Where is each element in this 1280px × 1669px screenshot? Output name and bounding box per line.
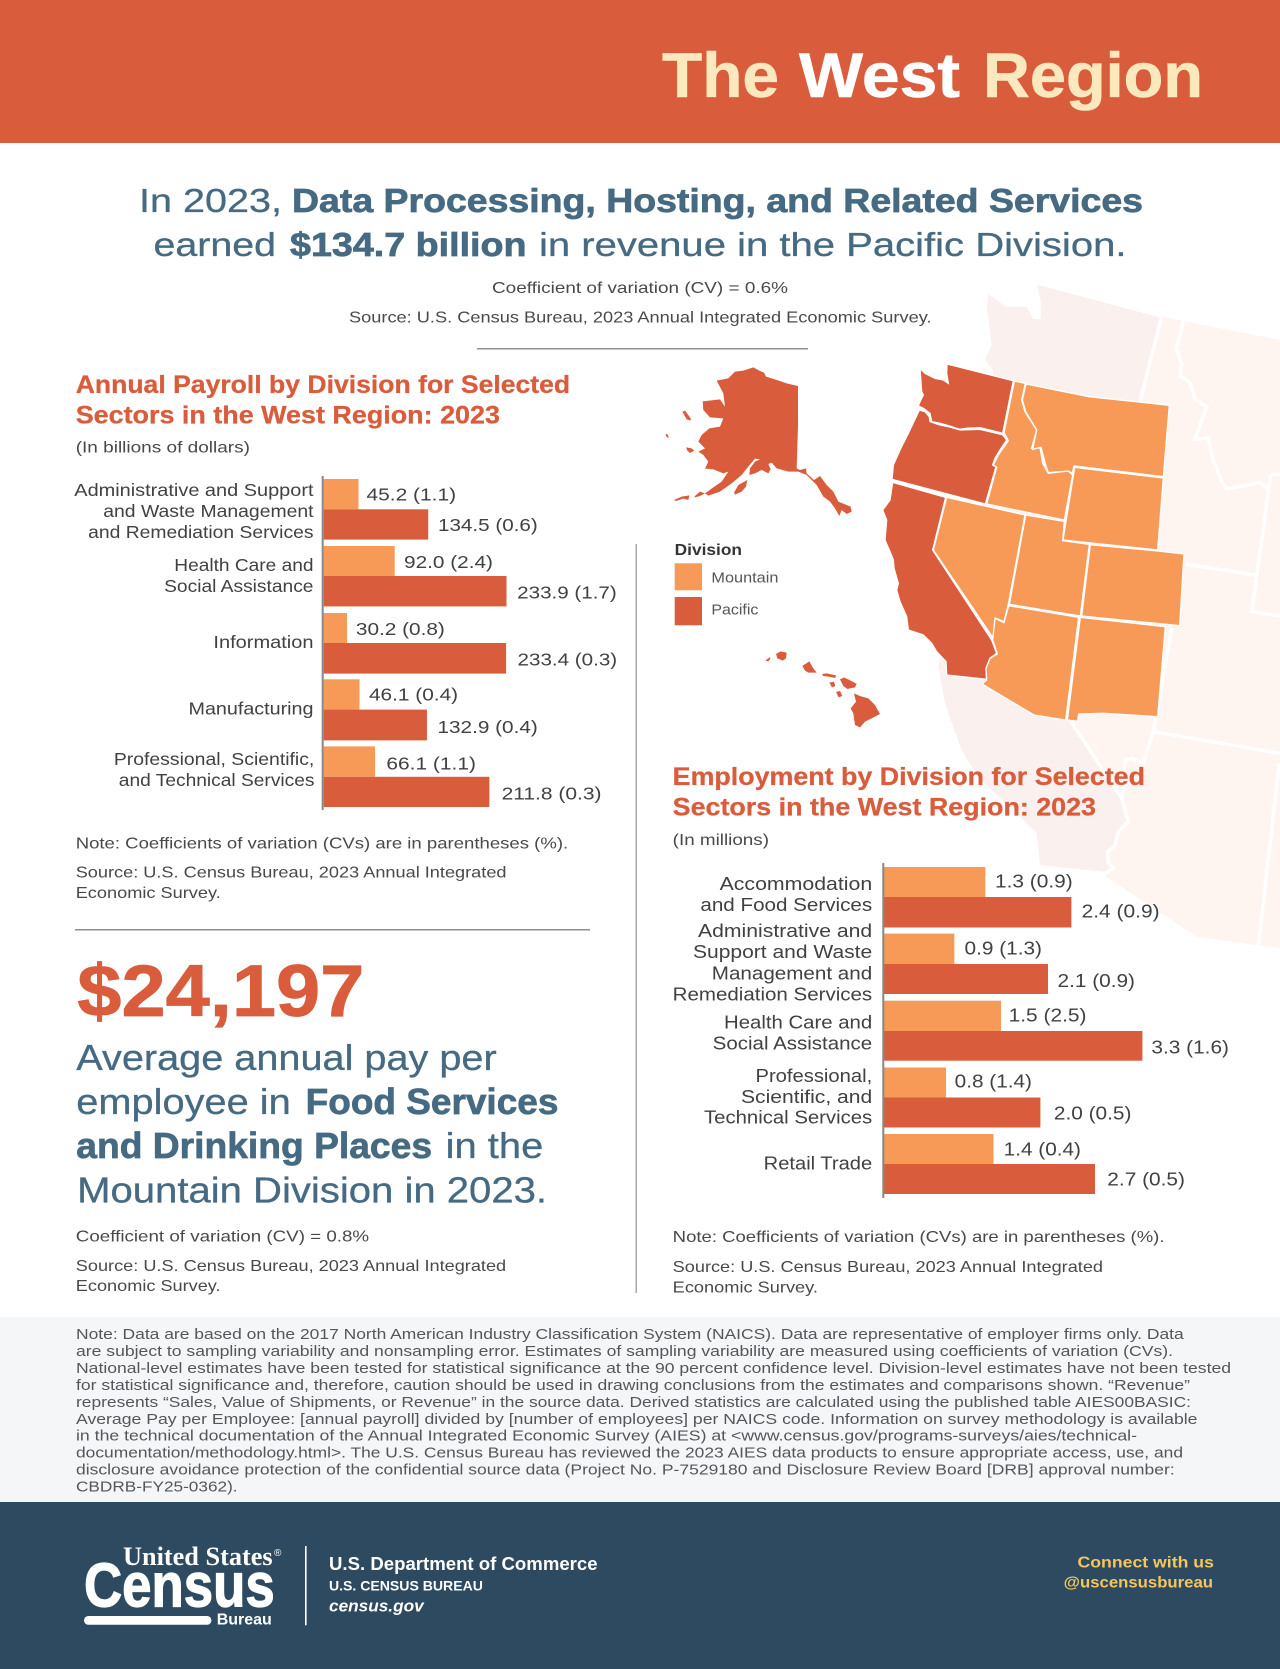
- value labels: employment: 0.8 (1.4): [955, 1072, 1032, 1092]
- bars: payroll: [322, 476, 507, 810]
- note and source: employment: Source: U.S. Census Bureau, 2023 Annual Integrated: [673, 1259, 1103, 1276]
- heading: annual payroll: [76, 371, 570, 430]
- panel: employment chart: [673, 763, 1229, 1297]
- heading: annual payroll: Annual Payroll by Division for Selected: [76, 371, 570, 399]
- social handle: [1064, 1554, 1214, 1591]
- value labels: payroll: 30.2 (0.8): [356, 619, 445, 639]
- value labels: employment: 2.1 (0.9): [1058, 971, 1135, 991]
- department text: U.S. CENSUS BUREAU: [329, 1578, 483, 1594]
- category labels: payroll: Manufacturing: [189, 699, 314, 719]
- value labels: employment: 3.3 (1.6): [1151, 1038, 1229, 1058]
- bars: employment: [882, 863, 1142, 1198]
- headline statistic: $134.7 billion: [290, 226, 526, 263]
- value labels: payroll: 66.1 (1.1): [386, 753, 476, 773]
- category labels: employment: Support and Waste: [693, 942, 872, 962]
- value labels: employment: 2.4 (0.9): [1082, 902, 1160, 922]
- value labels: employment: 1.3 (0.9): [995, 872, 1073, 892]
- heading: employment: Sectors in the West Region: 2023: [673, 794, 1096, 822]
- panel: average annual pay callout: [76, 951, 558, 1295]
- value labels: payroll: [356, 484, 617, 804]
- value labels: employment: [955, 872, 1229, 1190]
- logo: United States Census Bureau: ®: [274, 1548, 282, 1559]
- logo: United States Census Bureau: United States: [123, 1542, 273, 1571]
- category labels: employment: Health Care and: [724, 1013, 872, 1033]
- unit note: millions: (In millions): [673, 832, 769, 849]
- category labels: employment: Technical Services: [704, 1108, 872, 1128]
- headline statistic: [139, 182, 1143, 263]
- category labels: payroll: and Waste Management: [103, 501, 314, 521]
- value labels: payroll: 45.2 (1.1): [366, 484, 456, 504]
- value labels: employment: 1.5 (2.5): [1009, 1005, 1086, 1025]
- category labels: employment: [673, 874, 872, 1174]
- legend: Division: [675, 542, 778, 625]
- methodology note text: are subject to sampling variability and nonsampling error. Estimates of sampling variability are measured using coefficients of variation (CVs).: [76, 1343, 1173, 1360]
- value labels: payroll: 132.9 (0.4): [437, 717, 538, 737]
- headline statistic: earned: [154, 226, 276, 263]
- coefficient and source: pay: Economic Survey.: [76, 1278, 221, 1295]
- value labels: employment: 0.9 (1.3): [964, 939, 1042, 959]
- note and source: payroll: Source: U.S. Census Bureau, 2023 Annual Integrated: [76, 865, 507, 882]
- category labels: employment: Scientific, and: [741, 1087, 872, 1107]
- headline coefficient and source: Source: U.S. Census Bureau, 2023 Annual Integrated Economic Survey.: [349, 310, 932, 327]
- callout text: Average annual pay per: [76, 1037, 497, 1078]
- callout text: employee in: [76, 1081, 291, 1122]
- value labels: payroll: 211.8 (0.3): [502, 784, 602, 804]
- callout text: Mountain Division in 2023.: [77, 1169, 547, 1211]
- map: Pacific states: [883, 364, 1013, 679]
- legend: Division: Division: [675, 542, 742, 559]
- background map: pale western United States: [938, 284, 1280, 948]
- callout text: and Drinking Places: [76, 1125, 432, 1166]
- category labels: employment: and Food Services: [700, 895, 872, 915]
- heading: annual payroll: Sectors in the West Region: 2023: [76, 401, 500, 430]
- coefficient and source: pay: Source: U.S. Census Bureau, 2023 Annual Integrated: [76, 1258, 506, 1275]
- map: Hawaii: [765, 651, 880, 727]
- legend: Division: Mountain: [711, 569, 778, 586]
- methodology note text: represents “Sales, Value of Shipments, or Revenue” in the source data. Derived statistics are calculated using the published table AIES00BASIC:: [76, 1394, 1191, 1411]
- headline statistic: Data Processing, Hosting, and Related Services: [292, 182, 1143, 219]
- title: The West Region: West: [799, 41, 960, 111]
- map: contiguous states: [883, 364, 1184, 721]
- title: The West Region: Region: [983, 41, 1203, 111]
- department text: census.gov: [329, 1596, 425, 1615]
- title: The West Region: [662, 41, 1203, 111]
- category labels: payroll: and Technical Services: [119, 770, 315, 790]
- logo: United States Census Bureau: Bureau: [217, 1611, 272, 1628]
- headline statistic: in revenue in the Pacific Division.: [539, 226, 1126, 263]
- note and source: payroll: Note: Coefficients of variation (CVs) are in parentheses (%).: [76, 835, 568, 852]
- category labels: payroll: [74, 480, 315, 790]
- department text: [329, 1554, 598, 1615]
- category labels: payroll: Administrative and Support: [74, 480, 314, 500]
- value labels: payroll: 46.1 (0.4): [369, 684, 458, 704]
- methodology note text: Average Pay per Employee: [annual payroll] divided by [number of employees] per NAICS code. Information on survey methodology is available: [76, 1411, 1198, 1428]
- note and source: payroll: [76, 835, 568, 902]
- category labels: employment: Accommodation: [720, 874, 872, 894]
- methodology note text: for statistical significance and, therefore, caution should be used in drawing conclusions from the estimates and comparisons shown. “Revenue”: [76, 1377, 1190, 1394]
- big number: $24,197: $24,197: [77, 951, 364, 1032]
- logo: United States Census Bureau: Census: [84, 1552, 275, 1621]
- coefficient and source: pay: [76, 1228, 506, 1295]
- map: Alaska: [666, 367, 852, 516]
- value labels: payroll: 92.0 (2.4): [404, 552, 493, 572]
- value labels: employment: 1.4 (0.4): [1004, 1140, 1081, 1160]
- note and source: employment: Note: Coefficients of variation (CVs) are in parentheses (%).: [673, 1229, 1164, 1246]
- methodology note text: disclosure avoidance protection of the confidential source data (Project No. P-7529180 and Disclosure Review Board [DRB] approval number:: [76, 1462, 1175, 1479]
- heading: employment: [673, 763, 1145, 822]
- note and source: payroll: Economic Survey.: [76, 885, 221, 902]
- category labels: payroll: Professional, Scientific,: [114, 749, 314, 769]
- note and source: employment: [673, 1229, 1164, 1297]
- social handle: @uscensusbureau: [1064, 1574, 1213, 1591]
- category labels: payroll: Health Care and: [174, 555, 314, 575]
- value labels: payroll: 233.9 (1.7): [517, 583, 617, 603]
- category labels: payroll: Information: [213, 632, 314, 652]
- category labels: employment: Social Assistance: [713, 1034, 872, 1054]
- methodology note text: Note: Data are based on the 2017 North American Industry Classification System (NAICS). Data are representative of employer firms only. Data: [76, 1326, 1184, 1343]
- category labels: employment: Administrative and: [698, 921, 872, 941]
- category labels: employment: Remediation Services: [673, 984, 872, 1004]
- headline coefficient and source: Coefficient of variation (CV) = 0.6%: [492, 280, 788, 297]
- social handle: Connect with us: [1078, 1554, 1214, 1571]
- panel: methodology note: [0, 1317, 1280, 1502]
- note and source: employment: Economic Survey.: [673, 1280, 818, 1297]
- map: Mountain states: [933, 381, 1184, 721]
- header banner: [0, 0, 1280, 143]
- value labels: employment: 2.0 (0.5): [1054, 1104, 1131, 1124]
- methodology note text: in the technical documentation of the Annual Integrated Economic Survey (AIES) at <www.census.gov/programs-surveys/aies/technical-: [76, 1428, 1137, 1445]
- methodology note text: National-level estimates have been tested for statistical significance at the 90 percent confidence level. Division-level estimates have not been tested: [76, 1360, 1231, 1377]
- unit note: billions: (In billions of dollars): [76, 439, 250, 457]
- department text: U.S. Department of Commerce: [329, 1554, 598, 1574]
- value labels: payroll: 233.4 (0.3): [518, 649, 617, 669]
- value labels: payroll: 134.5 (0.6): [438, 515, 538, 535]
- callout text: Food Services: [306, 1081, 558, 1122]
- map: West Region states: [666, 364, 1184, 727]
- footer: [0, 1502, 1280, 1669]
- category labels: payroll: Social Assistance: [164, 576, 314, 596]
- callout text: in the: [446, 1125, 543, 1166]
- coefficient and source: pay: Coefficient of variation (CV) = 0.8%: [76, 1228, 369, 1246]
- callout text: [76, 1037, 558, 1211]
- headline statistic: In 2023,: [139, 182, 282, 219]
- methodology note text: [76, 1326, 1231, 1496]
- title: The West Region: The: [662, 41, 779, 111]
- value labels: employment: 2.7 (0.5): [1107, 1170, 1185, 1190]
- methodology note text: documentation/methodology.html>. The U.S. Census Bureau has reviewed the 2023 AIES data products to ensure appropriate access, use, and: [76, 1445, 1183, 1462]
- category labels: employment: Retail Trade: [764, 1154, 872, 1174]
- legend: Division: Pacific: [711, 602, 759, 619]
- heading: employment: Employment by Division for Selected: [673, 763, 1145, 791]
- headline coefficient and source: [349, 280, 932, 327]
- methodology note text: CBDRB-FY25-0362).: [76, 1479, 238, 1496]
- panel: annual payroll chart: [74, 371, 617, 902]
- category labels: payroll: and Remediation Services: [88, 522, 314, 542]
- category labels: employment: Management and: [712, 963, 872, 983]
- category labels: employment: Professional,: [756, 1066, 872, 1086]
